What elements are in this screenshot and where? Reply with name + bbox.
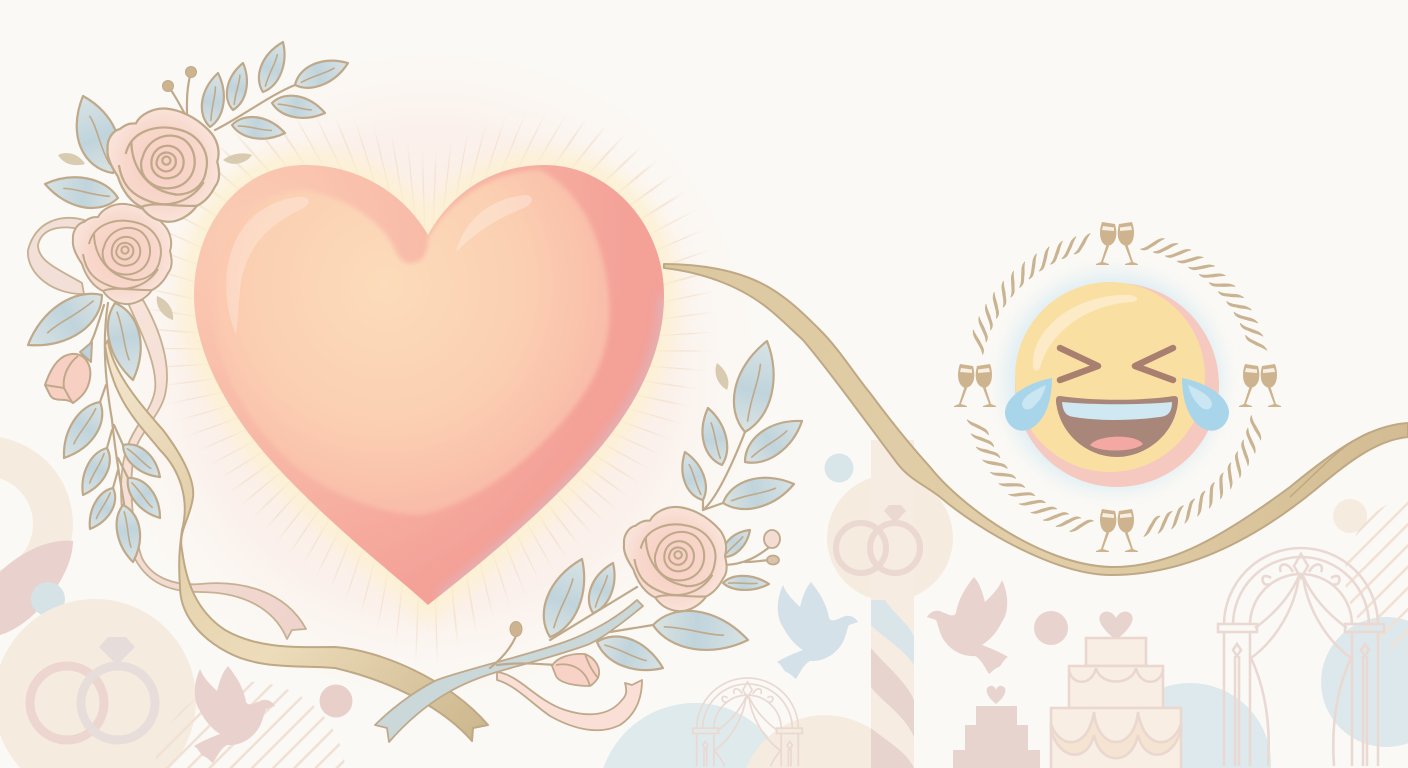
icon: berry [510, 622, 522, 636]
background shapes: bottom centre [603, 454, 904, 768]
icon: dove bottom left [194, 666, 275, 763]
icon: bottom bud [552, 654, 599, 686]
icon: champagne flutes left [954, 364, 996, 407]
icon: blue dove [777, 582, 858, 679]
icon: rose 2 [73, 204, 172, 304]
small tan leaf [715, 363, 728, 390]
gold ribbon: main wave [664, 264, 1408, 575]
teeth [1062, 402, 1172, 420]
icon: rose bud [45, 342, 92, 403]
striped column with ring medallion [827, 440, 953, 768]
icon: rose 3 [624, 507, 727, 611]
background shapes: bottom left [0, 437, 352, 768]
rope ring around emoji [967, 234, 1267, 536]
leaves [534, 336, 809, 680]
icon: champagne flutes bottom [1096, 509, 1138, 552]
pink back circle [1015, 283, 1219, 487]
icon: wedding rings bottom left [30, 637, 155, 740]
left gloss highlight [226, 197, 309, 335]
small tan leaves [58, 153, 252, 320]
pink ribbon tail [497, 672, 642, 730]
stems [84, 72, 295, 510]
pink dot [1034, 611, 1068, 645]
gold ribbon: left [105, 340, 488, 741]
eyes [1060, 348, 1173, 380]
yellow face [1015, 282, 1205, 472]
stems [490, 432, 773, 668]
right gloss highlight [456, 195, 532, 252]
icon: champagne flutes top [1096, 222, 1138, 265]
tongue [1090, 437, 1143, 451]
right tear [1182, 378, 1229, 431]
icon: large wedding cake [1051, 611, 1181, 768]
blue-grey stem ribbon [375, 600, 643, 742]
heart rays [258, 180, 598, 520]
mouth [1056, 396, 1178, 457]
icon: champagne flutes right [1239, 364, 1281, 407]
icon: rose 1 [107, 109, 219, 222]
heart [194, 165, 664, 605]
icon: small arch [693, 678, 802, 766]
face highlight [1033, 295, 1137, 371]
icon: buds [764, 530, 780, 564]
heart lower right rim [440, 295, 664, 597]
floral spray: top left [19, 38, 352, 564]
background shapes: bottom right [1109, 497, 1408, 768]
pink ribbon: left lower [121, 300, 306, 639]
leaves: top branch [19, 38, 352, 564]
floral spray: bottom right of heart [375, 336, 809, 742]
blue glow [1005, 274, 1221, 490]
heart yellow glow [194, 165, 664, 605]
emoji: face with tears of joy [1005, 274, 1229, 490]
icon: large arch [1218, 548, 1384, 766]
icon: pink dove [927, 577, 1008, 674]
inner light heart shading [212, 170, 610, 515]
pink ribbon: loop [28, 218, 84, 294]
icon: berries [162, 66, 196, 92]
left tear [1005, 378, 1052, 431]
icon: wedding rings on medallion [836, 505, 920, 573]
heart aura [90, 55, 770, 695]
icon: small cake [953, 686, 1040, 768]
